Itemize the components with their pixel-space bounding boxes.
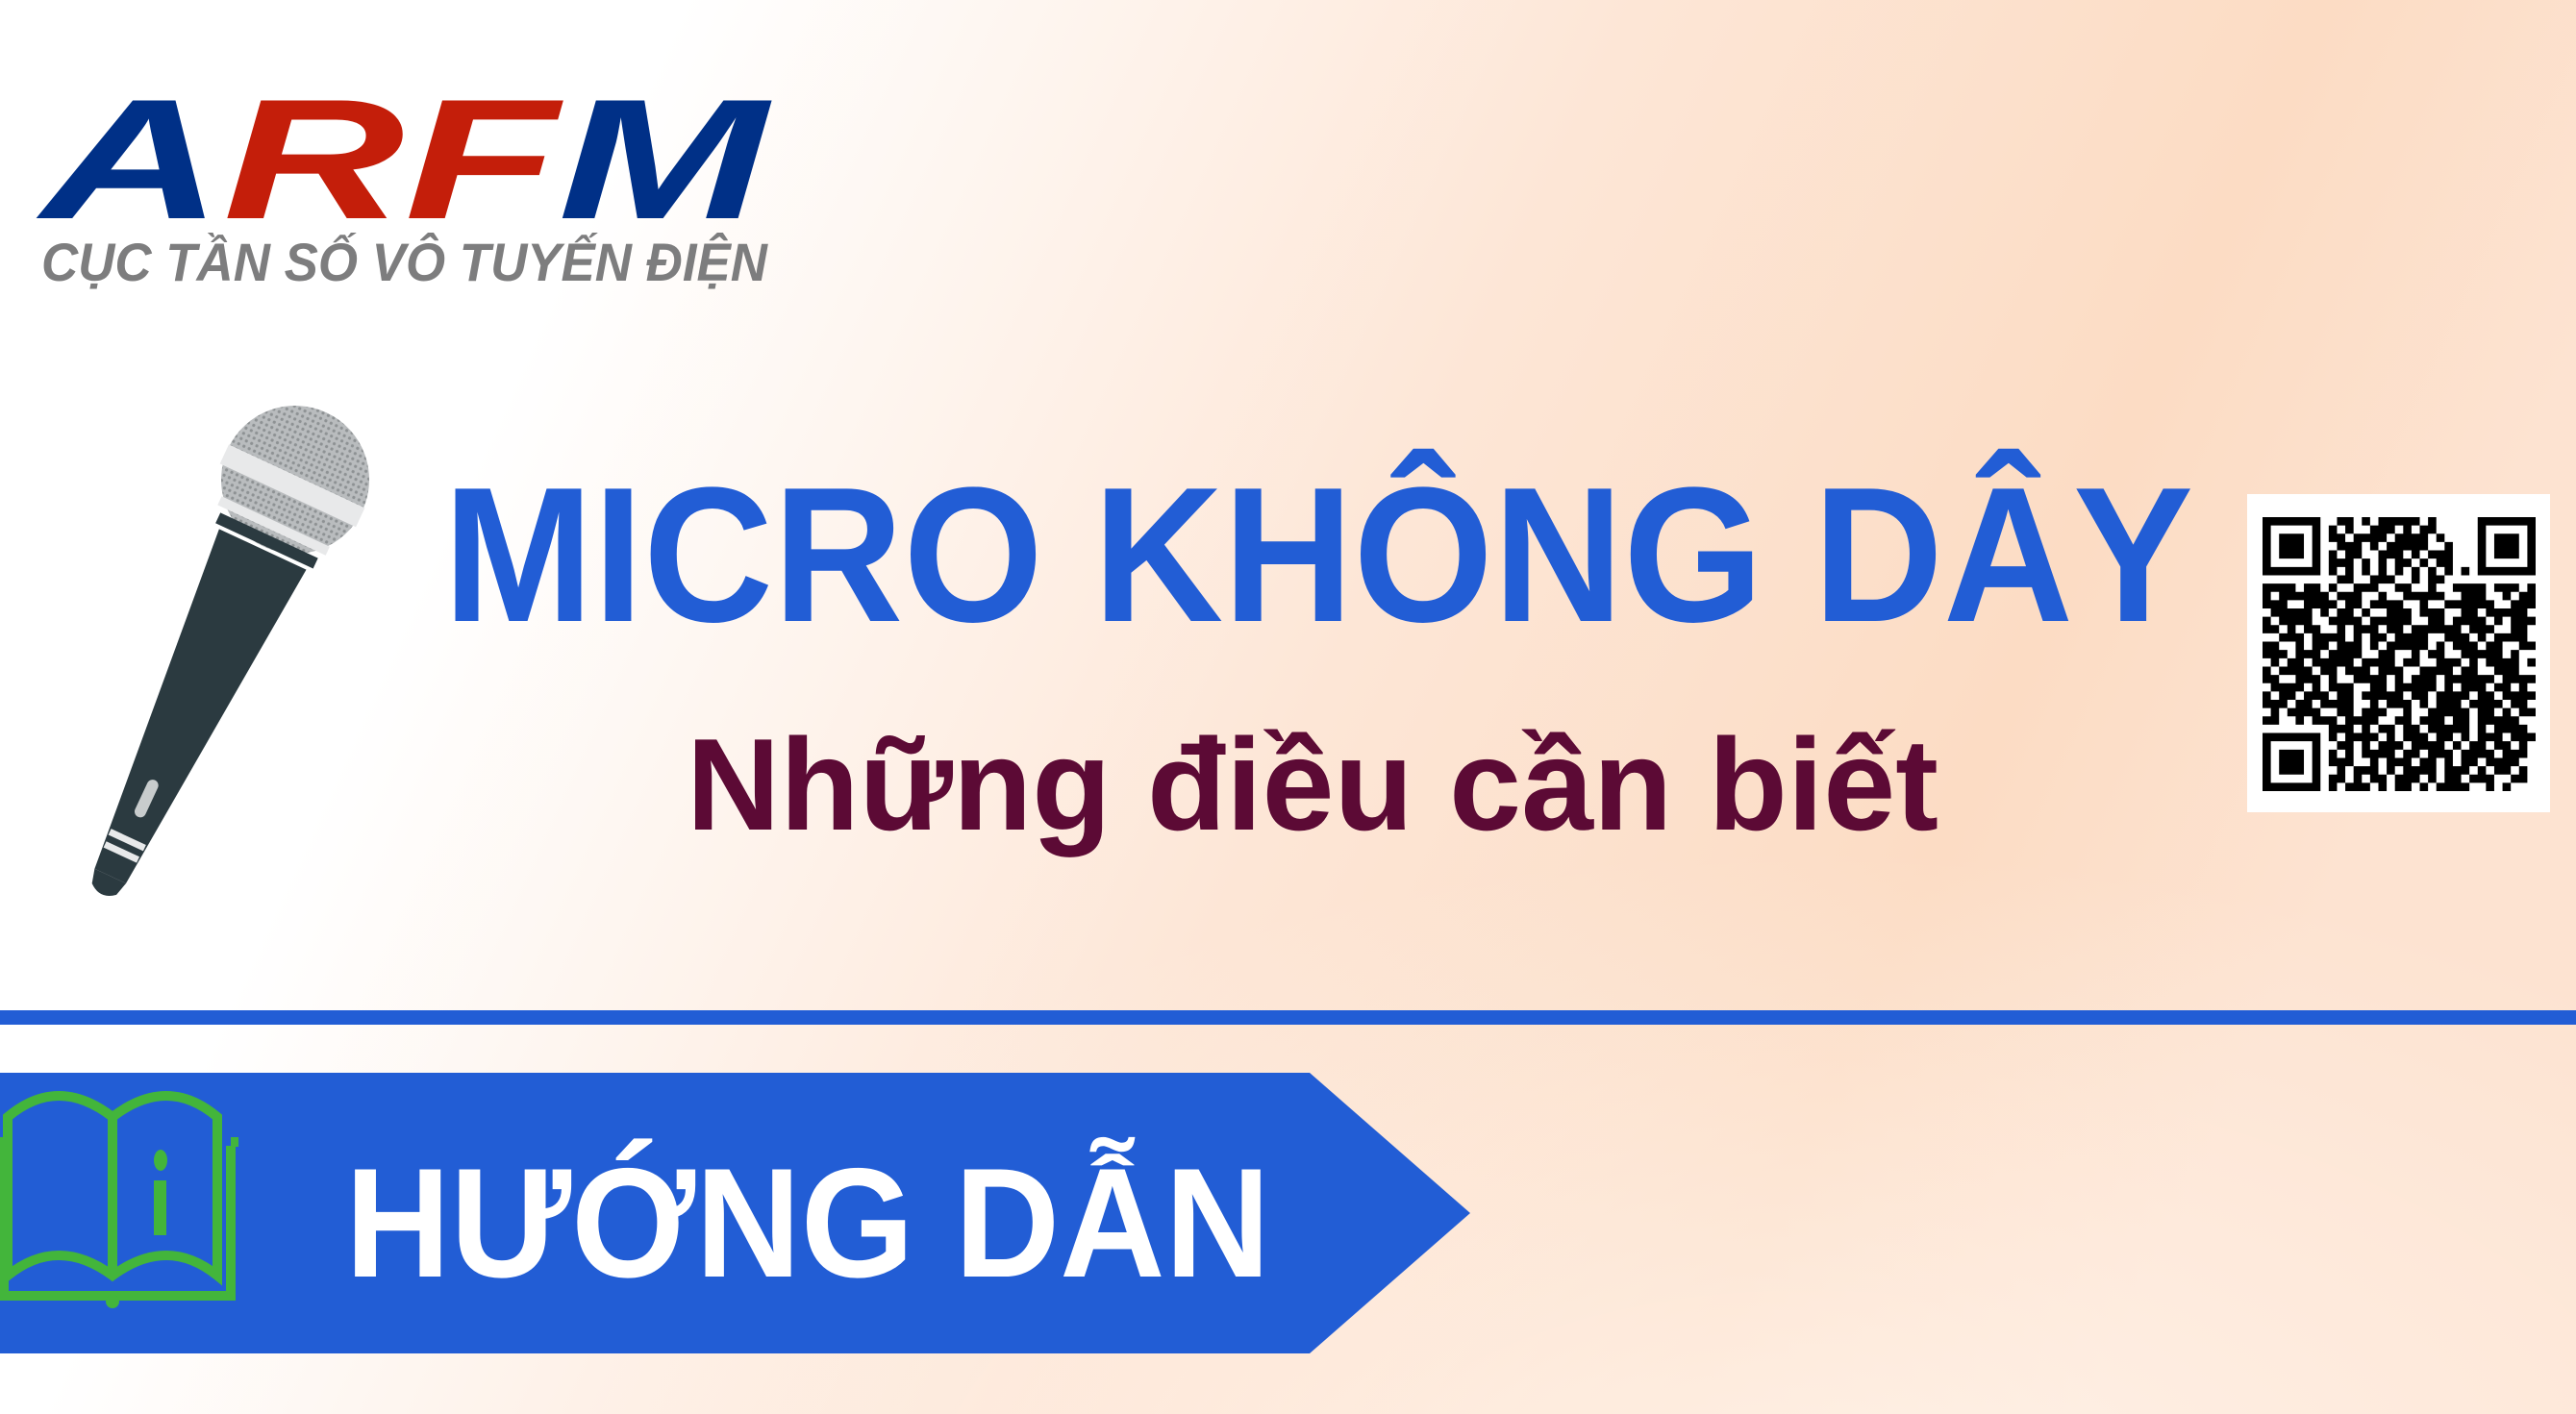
banner text: HƯỚNG DẪN (345, 1136, 1270, 1310)
title: MICRO KHÔNG DÂY (443, 448, 2193, 662)
icon: microphone (34, 381, 394, 926)
logo tagline: CỤC TẦN SỐ VÔ TUYẾN ĐIỆN (41, 232, 768, 292)
subtitle: Những điều cần biết (687, 711, 1938, 857)
QR code (2247, 494, 2550, 812)
banner: HƯỚNG DẪN (0, 1073, 1470, 1353)
icon: open book with info (0, 1096, 238, 1308)
logo: ARFM: A RF M (36, 63, 772, 255)
